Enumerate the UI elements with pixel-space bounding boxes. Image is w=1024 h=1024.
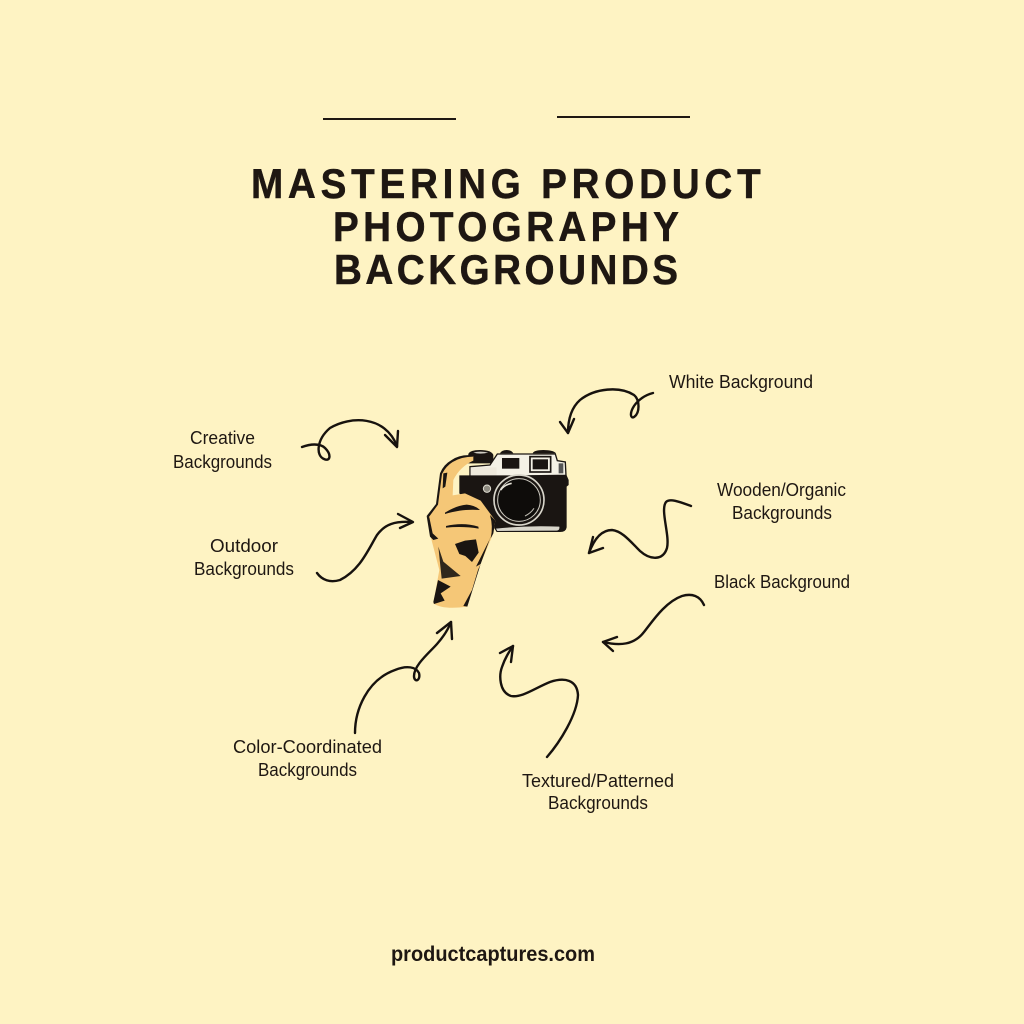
label: color-coordinated backgrounds: Color-Coordinated	[233, 737, 382, 757]
arrow: outdoor	[317, 514, 413, 581]
arrow: white	[560, 389, 653, 433]
title: PHOTOGRAPHY	[333, 202, 679, 250]
label: textured/patterned backgrounds	[522, 771, 674, 813]
arrow: color-coordinated	[355, 622, 452, 733]
title: MASTERING PRODUCT	[251, 159, 761, 207]
label: black background: Black Background	[714, 572, 850, 592]
label: outdoor backgrounds: Backgrounds	[194, 559, 294, 579]
camera body	[459, 475, 569, 532]
label: color-coordinated backgrounds: Backgrounds	[258, 760, 357, 780]
hand	[427, 456, 495, 608]
arrow: wooden	[589, 500, 691, 558]
arrow: black	[603, 595, 704, 651]
arrow: textured	[500, 646, 578, 757]
icon: hand holding camera	[427, 450, 569, 608]
arrow: creative	[302, 420, 398, 460]
label: textured/patterned backgrounds: Backgrounds	[548, 793, 648, 813]
label: textured/patterned backgrounds: Textured/Patterned	[522, 771, 674, 791]
camera top plate	[468, 450, 493, 463]
label: creative backgrounds: Backgrounds	[173, 452, 272, 472]
label: color-coordinated backgrounds	[233, 737, 382, 780]
label: wooden/organic backgrounds	[717, 480, 846, 523]
title	[251, 159, 761, 293]
label: wooden/organic backgrounds: Backgrounds	[732, 503, 832, 523]
camera lens	[494, 475, 544, 525]
label: creative backgrounds: Creative	[190, 428, 255, 448]
label: creative backgrounds	[173, 428, 272, 472]
footer website: productcaptures.com	[391, 943, 595, 966]
title: BACKGROUNDS	[334, 245, 678, 293]
label: wooden/organic backgrounds: Wooden/Organic	[717, 480, 846, 500]
label: white background: White Background	[669, 372, 813, 392]
label: outdoor backgrounds	[194, 536, 294, 579]
label: outdoor backgrounds: Outdoor	[210, 536, 278, 556]
hand shading	[427, 455, 495, 607]
